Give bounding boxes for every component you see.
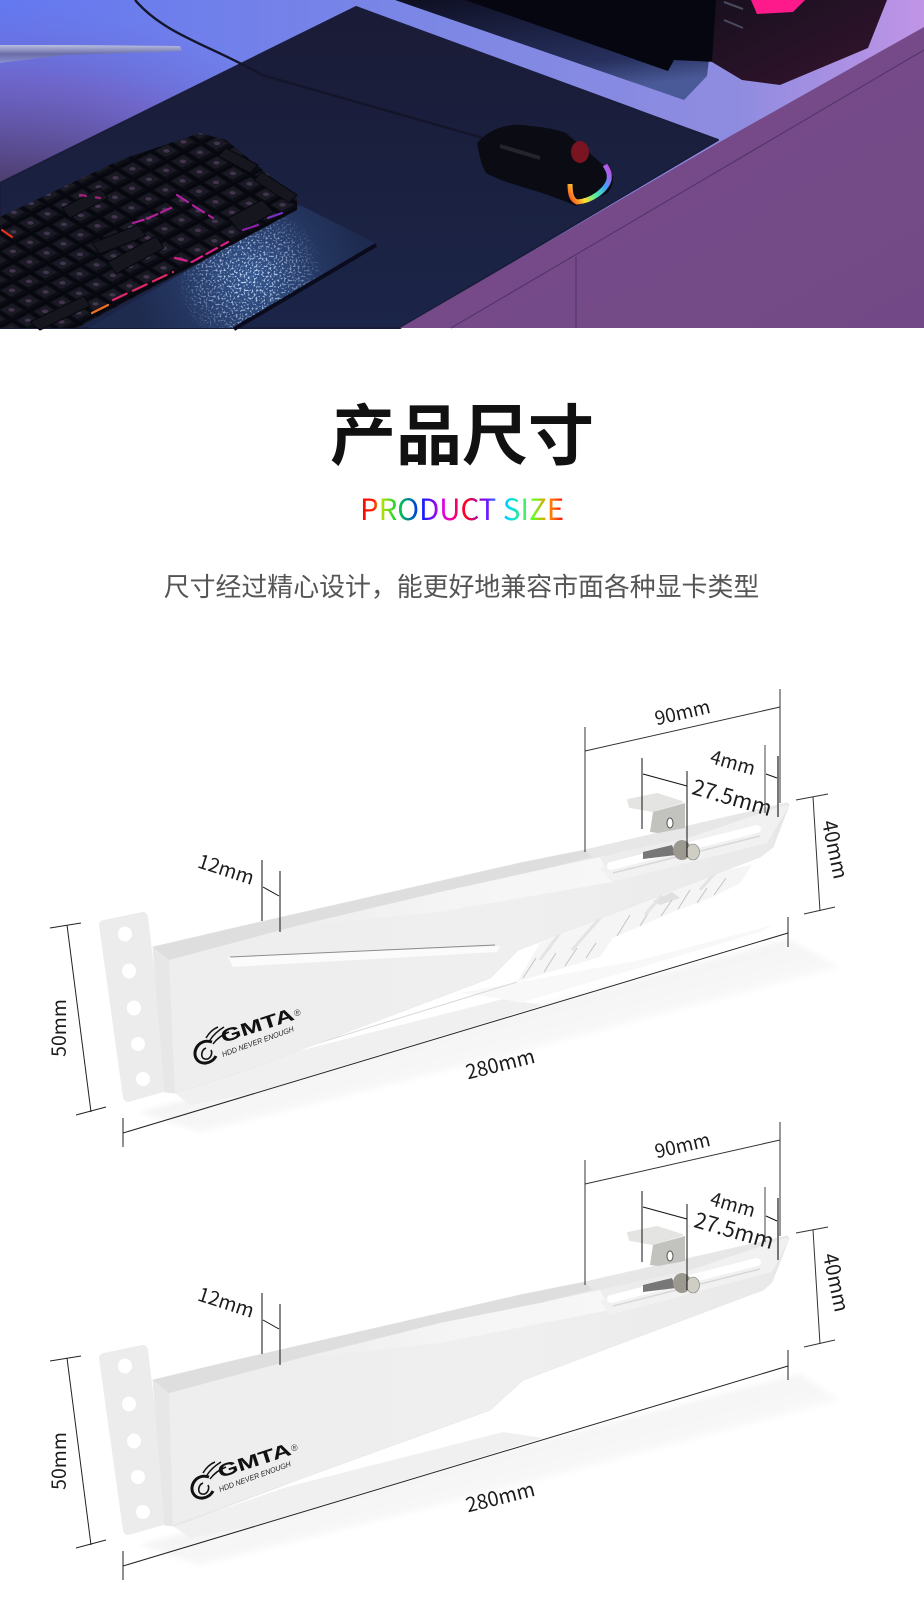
mounting plate <box>104 917 163 1097</box>
dimension 12mm: 12mm <box>195 1278 259 1324</box>
dimension 40mm <box>796 794 857 914</box>
subtitle: PRODUCT SIZE: PRODUCT SIZE <box>360 487 564 529</box>
logo GMTA: GMTA <box>215 1439 294 1482</box>
dimension 90mm <box>585 1122 780 1285</box>
bracket diagram 1 <box>43 689 857 1147</box>
L clip and screw <box>628 794 700 860</box>
logo GMTA: ® <box>291 1443 298 1453</box>
dimension 4mm <box>707 1185 778 1260</box>
logo GMTA <box>192 1439 298 1498</box>
mouse pad <box>0 7 718 328</box>
long slot <box>228 945 500 967</box>
dimension 50mm <box>43 923 106 1115</box>
end slot <box>611 829 760 873</box>
dimension 27.5mm: 27.5mm <box>691 1204 778 1256</box>
monitor shadow block <box>465 0 716 71</box>
cable <box>135 0 483 138</box>
dimension 4mm <box>707 743 778 817</box>
dimension 40mm: 40mm <box>817 1250 858 1314</box>
dimension 4mm: 4mm <box>707 1185 759 1223</box>
cabinet seams <box>451 50 924 328</box>
keyboard <box>0 133 297 330</box>
purple cabinet front <box>400 27 924 328</box>
logo GMTA: GMTA <box>218 1004 297 1047</box>
dimension 90mm: 90mm <box>652 692 713 731</box>
gaming mouse <box>477 125 613 206</box>
dimension 280mm: 280mm <box>462 1040 538 1085</box>
pink light <box>751 0 805 14</box>
dimension 280mm <box>123 917 788 1147</box>
arm top strip <box>153 1282 592 1393</box>
dimension 280mm: 280mm <box>462 1473 538 1518</box>
mounting plate <box>104 1350 163 1530</box>
hero photo: gaming desk <box>0 0 924 330</box>
wide keys <box>30 148 297 330</box>
dimension 40mm <box>796 1227 858 1347</box>
dimension 27.5mm: 27.5mm <box>689 771 776 823</box>
logo GMTA <box>195 1004 301 1063</box>
arm side rim <box>153 803 789 1093</box>
dimension 90mm: 90mm <box>652 1125 713 1164</box>
end slot <box>611 1262 760 1306</box>
L clip and screw <box>628 1227 700 1293</box>
lower fin and floor fin <box>175 925 773 1105</box>
logo GMTA: ® <box>294 1008 301 1018</box>
arm upper plane <box>300 857 612 925</box>
monitor base <box>395 0 716 100</box>
dimension 27.5mm <box>642 1191 778 1290</box>
PC case <box>712 0 887 85</box>
bracket diagram 2 <box>43 1122 858 1580</box>
arm side rim <box>153 1236 789 1526</box>
dimension 90mm <box>585 689 780 852</box>
arm end section <box>600 805 789 882</box>
arm top strip <box>153 850 592 960</box>
dimension 40mm: 40mm <box>816 817 857 881</box>
dimension 280mm <box>123 1350 788 1580</box>
dimension 12mm <box>195 1278 280 1365</box>
dimension 12mm <box>195 845 280 932</box>
ribbed section <box>517 865 752 982</box>
dimension 27.5mm <box>642 758 776 857</box>
logo GMTA: HDD NEVER ENOUGH <box>218 1459 293 1494</box>
dimension 50mm <box>43 1356 106 1548</box>
keyboard underglow <box>2 195 282 313</box>
dimension 12mm: 12mm <box>195 845 259 891</box>
floor shadow <box>140 939 840 1132</box>
arm upper plane <box>300 1290 610 1358</box>
dimension 4mm: 4mm <box>707 743 759 781</box>
arm end section <box>600 1238 789 1315</box>
arm front face <box>169 1251 775 1525</box>
monitor arm <box>0 45 182 63</box>
description: 尺寸经过精心设计，能更好地兼容市面各种显卡类型 <box>164 567 759 604</box>
title: 产品尺寸 <box>330 383 594 479</box>
wrist rest <box>88 203 378 329</box>
floor shadow <box>140 1374 840 1565</box>
desk surface <box>0 0 924 328</box>
dimension 50mm: 50mm <box>43 1432 72 1490</box>
lower solid fin <box>173 1432 543 1538</box>
logo GMTA: HDD NEVER ENOUGH <box>221 1024 296 1059</box>
dimension 50mm: 50mm <box>43 999 72 1057</box>
arm front face <box>169 818 775 1093</box>
